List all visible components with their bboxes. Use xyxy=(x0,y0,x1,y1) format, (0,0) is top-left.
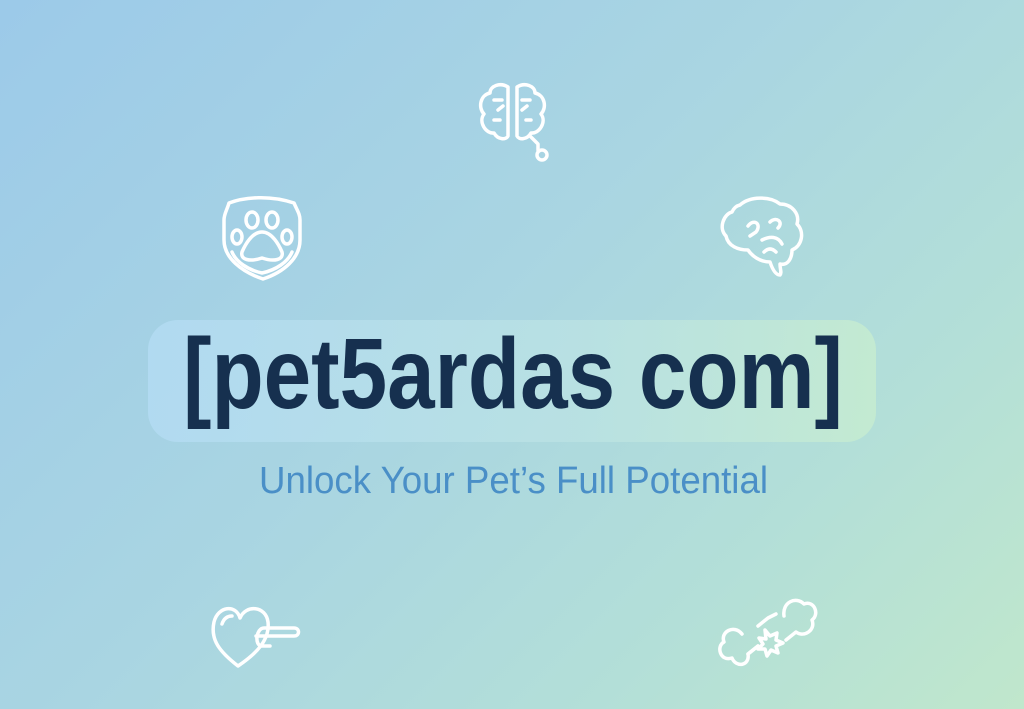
subtitle: Unlock Your Pet’s Full Potential xyxy=(259,460,768,502)
icon: bone with star xyxy=(720,600,816,664)
icon: brain with node (top) xyxy=(481,85,547,160)
icon: paw shield xyxy=(224,198,300,279)
title text: [pet5ardas com] xyxy=(183,318,843,430)
icon: heart with leash xyxy=(213,609,298,666)
icon: brain (right) xyxy=(722,198,802,275)
title pill xyxy=(148,318,876,442)
